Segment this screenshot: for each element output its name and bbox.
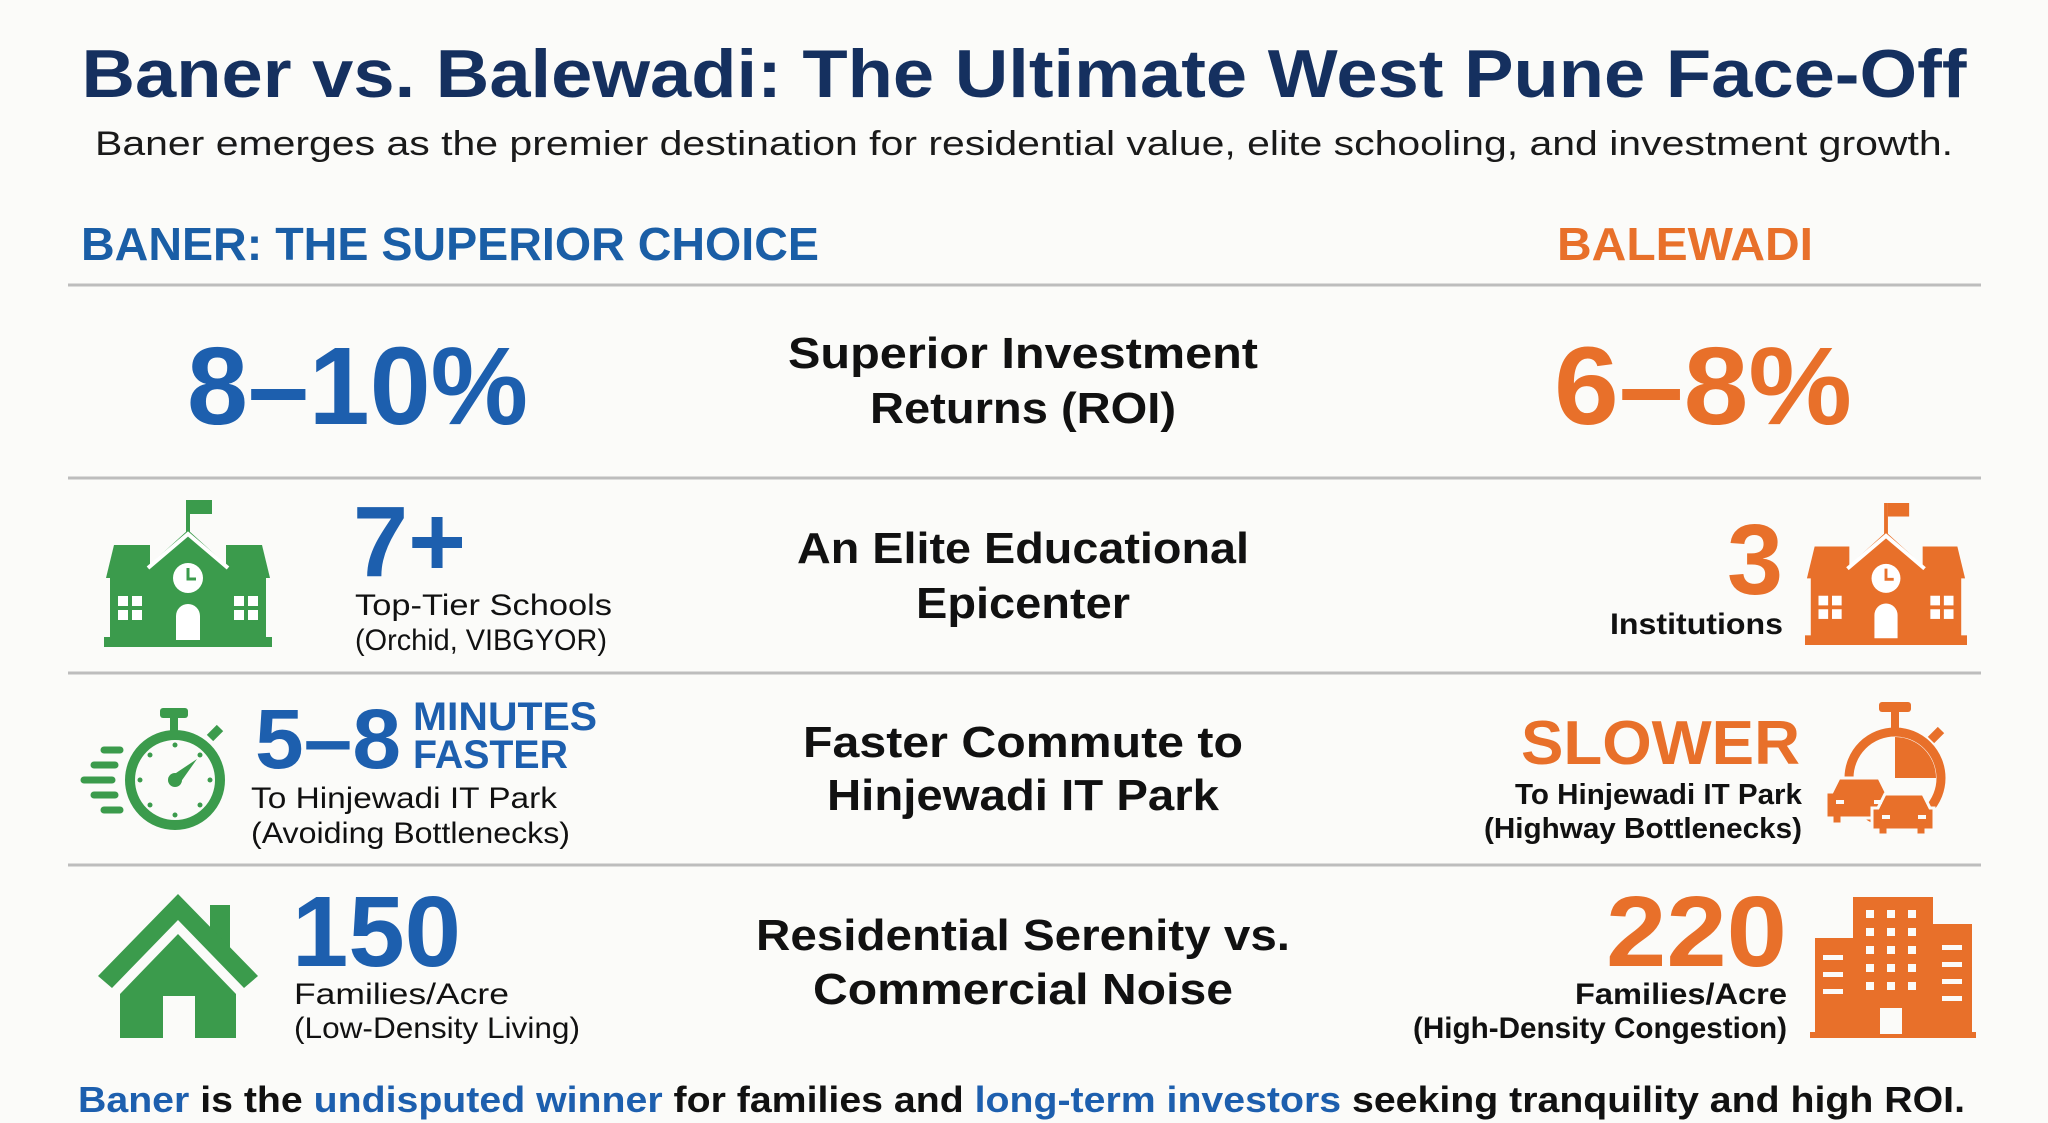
row: schools — [104, 486, 1967, 657]
icon: green house — [98, 894, 258, 1038]
baner commute value: FASTER — [413, 733, 568, 777]
balewadi commute value: To Hinjewadi IT Park — [1515, 779, 1803, 811]
baner commute value: To Hinjewadi IT Park — [251, 782, 558, 815]
density label: Residential Serenity vs. — [756, 911, 1290, 960]
balewadi density value — [1413, 876, 1787, 1045]
balewadi schools value: Institutions — [1610, 608, 1783, 641]
baner schools value: Top-Tier Schools — [355, 589, 612, 622]
baner commute value: 5–8 — [255, 692, 401, 786]
heading: balewadi: BALEWADI — [1557, 218, 1813, 270]
baner schools value — [353, 486, 612, 657]
baner density value — [292, 876, 580, 1045]
heading: baner: BANER: THE SUPERIOR CHOICE — [81, 218, 819, 270]
balewadi commute value — [1484, 709, 1803, 845]
schools label: An Elite Educational — [797, 524, 1249, 573]
balewadi ROI value: 6–8% — [1554, 325, 1852, 448]
balewadi density value: Families/Acre — [1575, 978, 1787, 1011]
icon: green school — [104, 500, 272, 647]
footer conclusion: Baner is the undisputed winner for families and long-term investors seeking tranquility and high ROI. — [78, 1079, 1965, 1120]
balewadi commute value: SLOWER — [1521, 709, 1800, 778]
balewadi density value: (High-Density Congestion) — [1413, 1012, 1787, 1045]
subtitle: Baner emerges as the premier destination for residential value, elite schooling, and investment growth. — [95, 125, 1953, 163]
row: commute — [84, 692, 1941, 850]
baner density value: (Low-Density Living) — [294, 1012, 580, 1045]
baner commute value: MINUTES — [413, 695, 597, 739]
row: density: Commercial Noise — [813, 965, 1233, 1014]
baner commute value: (Avoiding Bottlenecks) — [251, 817, 570, 850]
icon: orange buildings — [1810, 897, 1976, 1038]
balewadi schools value — [1610, 504, 1783, 641]
row: density — [98, 876, 1976, 1045]
baner density value: Families/Acre — [294, 978, 509, 1011]
commute label: Faster Commute to — [803, 718, 1243, 767]
baner schools value: (Orchid, VIBGYOR) — [355, 624, 607, 657]
row: schools: Epicenter — [916, 579, 1130, 628]
balewadi density value: 220 — [1606, 876, 1787, 988]
baner commute value — [251, 692, 597, 850]
icon: orange school — [1805, 503, 1967, 645]
row: commute: Hinjewadi IT Park — [827, 771, 1220, 820]
balewadi schools value: 3 — [1727, 504, 1783, 616]
row: ROI — [187, 325, 1852, 448]
baner schools value: 7+ — [353, 486, 466, 598]
icon: orange stopwatch with cars — [1826, 702, 1941, 835]
ROI label: Superior Investment — [788, 329, 1258, 378]
balewadi commute value: (Highway Bottlenecks) — [1484, 813, 1802, 845]
icon: green stopwatch — [84, 708, 220, 825]
baner density value: 150 — [292, 876, 461, 988]
row: ROI: Returns (ROI) — [870, 384, 1176, 433]
title: Baner vs. Balewadi: The Ultimate West Pune Face-Off — [82, 36, 1967, 112]
baner ROI value: 8–10% — [187, 325, 528, 448]
